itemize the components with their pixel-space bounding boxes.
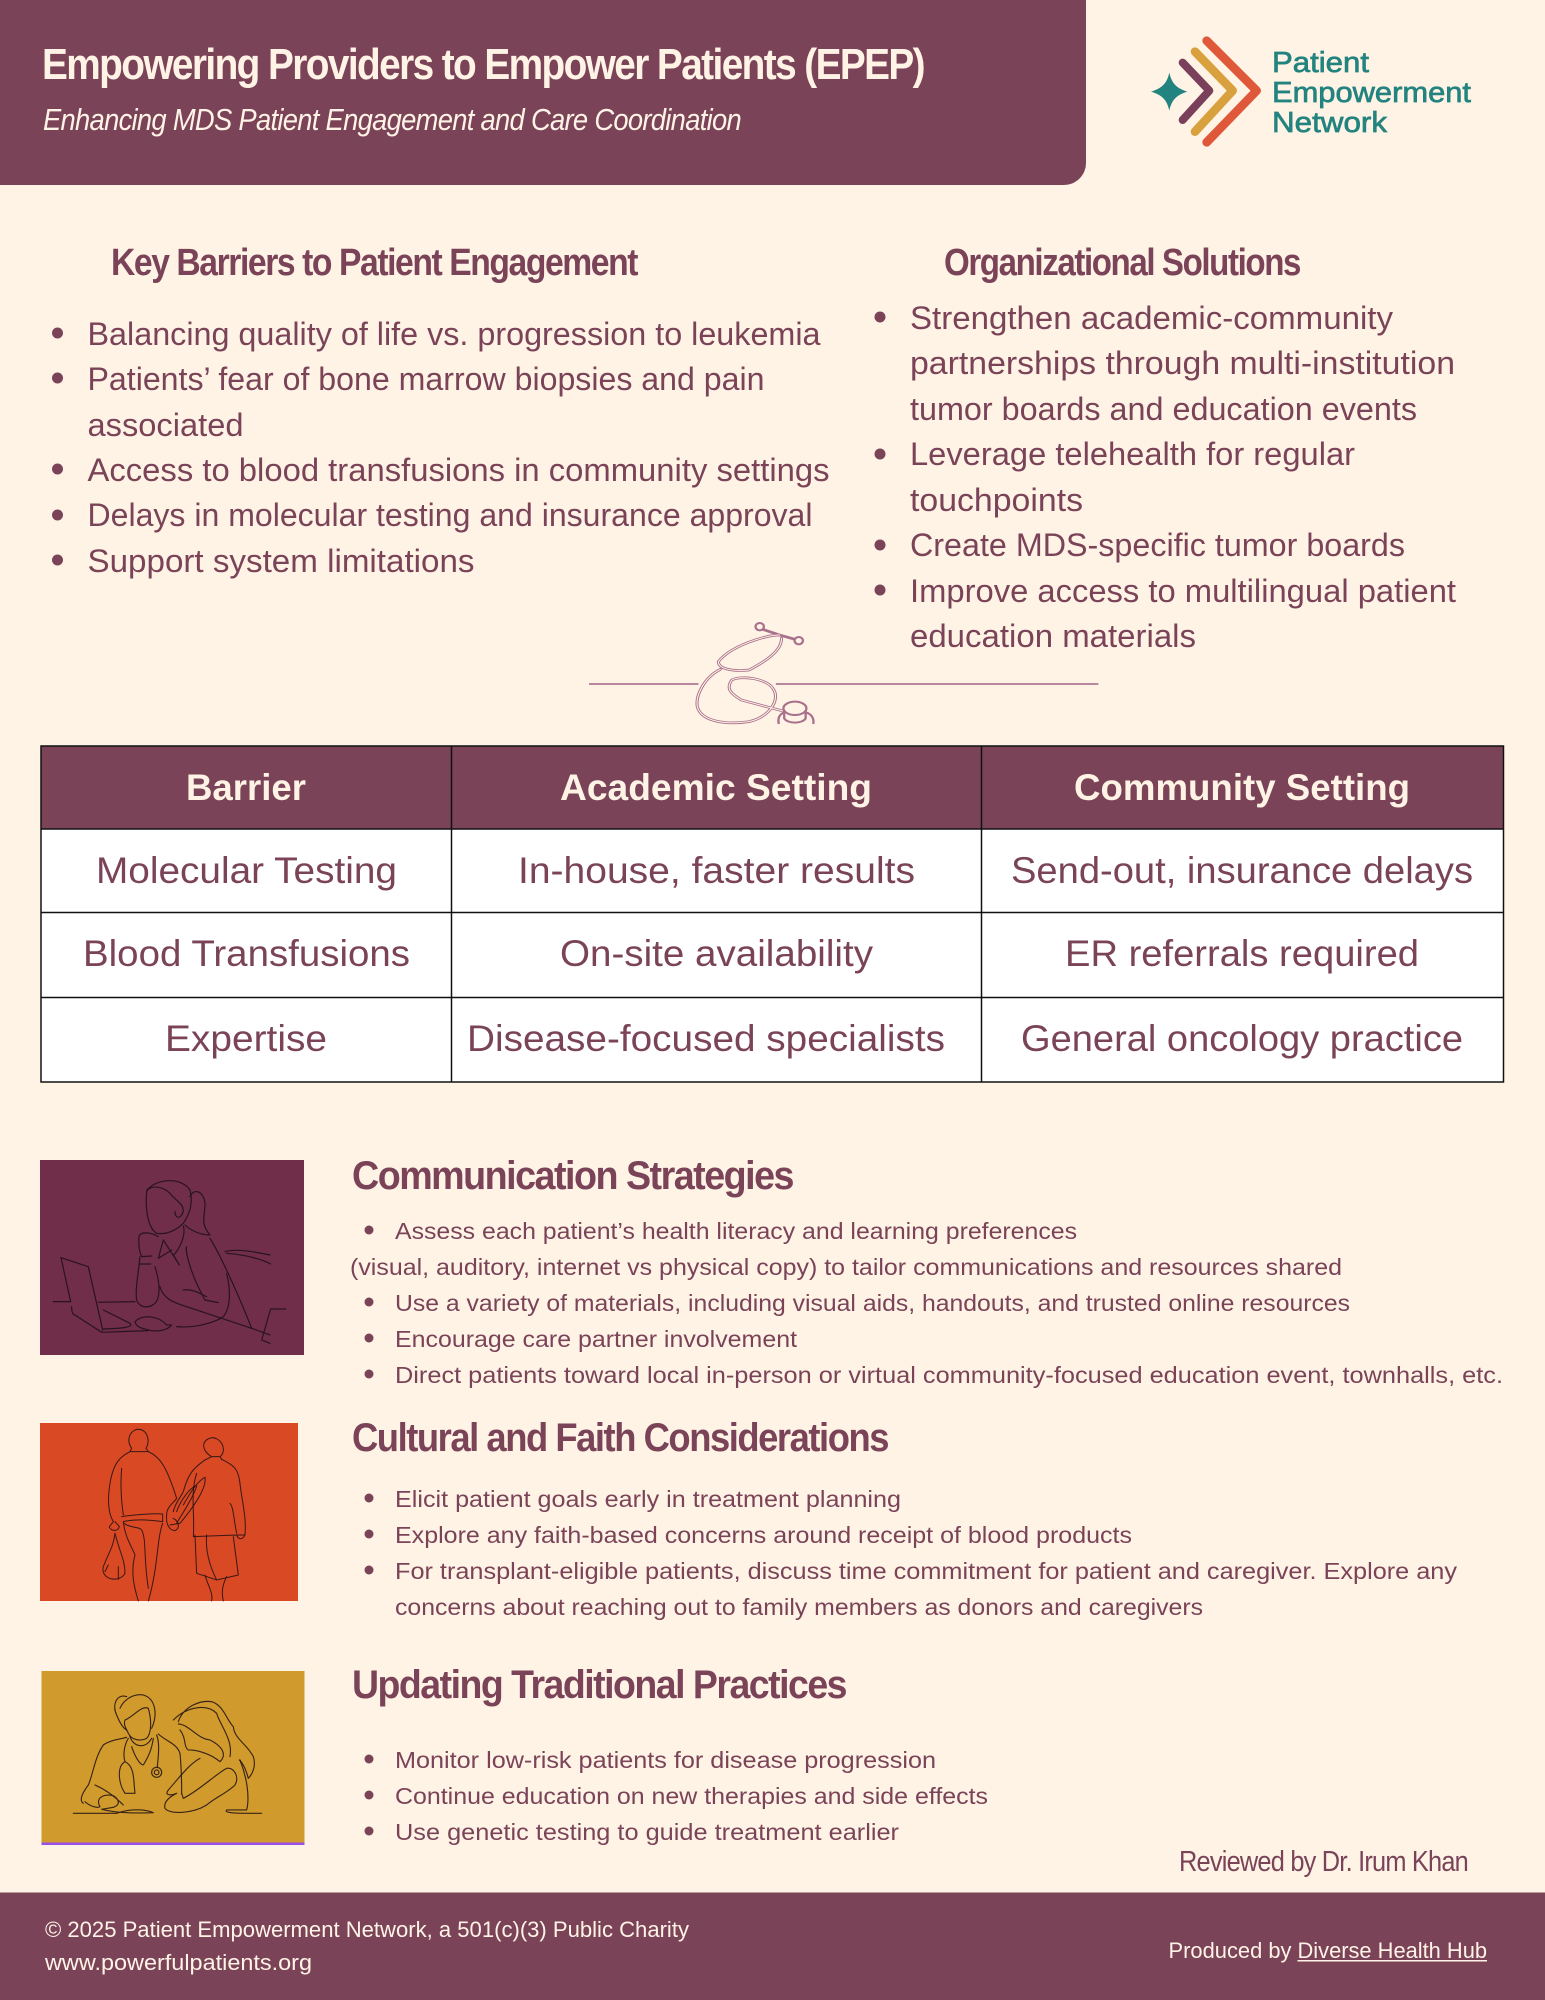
- illustration: woman at laptop: [40, 1160, 304, 1355]
- heading: organizational solutions: Organizational Solutions: [944, 242, 1300, 284]
- list: key barriers: Delays in molecular testing and insurance approval: [88, 497, 812, 533]
- footer copyright: © 2025 Patient Empowerment Network, a 501(c)(3) Public Charity: [45, 1917, 689, 1942]
- list: key barriers: Access to blood transfusions in community settings: [88, 452, 830, 488]
- comparison table: [41, 746, 1504, 1082]
- table body: [41, 829, 1504, 1082]
- panel: key barriers: [52, 242, 830, 579]
- table rows text: In-house, faster results: [518, 850, 915, 891]
- table rows text: Send-out, insurance delays: [1011, 850, 1473, 891]
- list: organizational solutions: Create MDS-specific tumor boards: [910, 527, 1405, 563]
- panel: communication strategies: [350, 1154, 1503, 1388]
- list: communication strategies: Encourage care partner involvement: [395, 1326, 797, 1352]
- icon: stethoscope divider: [589, 623, 1098, 724]
- table rows text: General oncology practice: [1021, 1018, 1463, 1059]
- list: key barriers: associated: [88, 407, 244, 443]
- footer producer credit: [1168, 1938, 1487, 1963]
- illustration: couple walking: [40, 1423, 298, 1601]
- table rows text: ER referrals required: [1065, 933, 1419, 974]
- table rows text: On-site availability: [560, 933, 874, 974]
- footer producer credit: Diverse Health Hub: [1298, 1938, 1487, 1963]
- table header row: Community Setting: [1074, 767, 1410, 808]
- list: updating traditional practices: Monitor low-risk patients for disease progression: [395, 1747, 936, 1773]
- logo wordmark: Patient: [1272, 47, 1369, 79]
- list: organizational solutions: tumor boards and education events: [910, 391, 1417, 427]
- list: updating traditional practices: [364, 1747, 988, 1845]
- list: cultural and faith considerations: For transplant-eligible patients, discuss time commitment for patient and caregiver. Explore any: [395, 1558, 1457, 1584]
- list: key barriers: Support system limitations: [88, 543, 474, 579]
- list: organizational solutions: Strengthen academic-community: [910, 300, 1393, 336]
- footer: [0, 1892, 1545, 2000]
- table header row: Barrier: [186, 767, 306, 808]
- list: cultural and faith considerations: concerns about reaching out to family members as donors and caregivers: [395, 1594, 1203, 1620]
- table rows text: Disease-focused specialists: [467, 1018, 945, 1059]
- heading: cultural and faith considerations: Cultural and Faith Considerations: [352, 1416, 888, 1460]
- logo: Patient Empowerment Network: [1151, 41, 1471, 142]
- panel: updating traditional practices: [352, 1663, 988, 1845]
- icon: chevrons and star: [1151, 41, 1257, 142]
- logo wordmark: Empowerment: [1272, 77, 1471, 109]
- subtitle: Enhancing MDS Patient Engagement and Care Coordination: [43, 102, 741, 137]
- list: key barriers: Balancing quality of life vs. progression to leukemia: [88, 316, 821, 352]
- table header row: [41, 746, 1504, 829]
- list: organizational solutions: [874, 300, 1456, 654]
- reviewer credit: Reviewed by Dr. Irum Khan: [1179, 1846, 1468, 1878]
- table header row: Academic Setting: [560, 767, 872, 808]
- list: organizational solutions: Improve access to multilingual patient: [910, 573, 1456, 609]
- list: key barriers: Patients’ fear of bone marrow biopsies and pain: [88, 361, 764, 397]
- logo wordmark: Network: [1272, 107, 1388, 139]
- list: cultural and faith considerations: [364, 1486, 1457, 1620]
- table rows text: Expertise: [165, 1018, 327, 1059]
- list: communication strategies: Assess each patient’s health literacy and learning preferences: [395, 1218, 1077, 1244]
- list: organizational solutions: Leverage telehealth for regular: [910, 436, 1355, 472]
- heading: communication strategies: Communication Strategies: [352, 1154, 793, 1198]
- list: organizational solutions: partnerships through multi-institution: [910, 345, 1455, 381]
- list: organizational solutions: touchpoints: [910, 482, 1083, 518]
- list: communication strategies: (visual, auditory, internet vs physical copy) to tailor communications and resources shared: [350, 1254, 1342, 1280]
- list: updating traditional practices: Use genetic testing to guide treatment earlier: [395, 1819, 899, 1845]
- footer producer credit: Produced by: [1168, 1938, 1292, 1963]
- panel: cultural and faith considerations: [352, 1416, 1457, 1620]
- list: cultural and faith considerations: Elicit patient goals early in treatment planning: [395, 1486, 901, 1512]
- list: communication strategies: Use a variety of materials, including visual aids, handouts, and trusted online resources: [395, 1290, 1350, 1316]
- list: organizational solutions: education materials: [910, 618, 1196, 654]
- list: communication strategies: Direct patients toward local in-person or virtual community-focused education event, townhalls, etc.: [395, 1362, 1503, 1388]
- panel: organizational solutions: [874, 242, 1456, 654]
- title: Empowering Providers to Empower Patients (EPEP): [42, 40, 924, 89]
- logo wordmark: [1272, 47, 1471, 139]
- list: updating traditional practices: Continue education on new therapies and side effects: [395, 1783, 988, 1809]
- table rows text: Blood Transfusions: [83, 933, 410, 974]
- heading: updating traditional practices: Updating Traditional Practices: [352, 1663, 846, 1707]
- footer website: www.powerfulpatients.org: [44, 1950, 312, 1975]
- header banner: [0, 0, 1086, 185]
- illustration: doctor and patient: [42, 1671, 304, 1845]
- list: key barriers: [52, 316, 830, 579]
- list: cultural and faith considerations: Explore any faith-based concerns around receipt of blood products: [395, 1522, 1132, 1548]
- list: communication strategies: [350, 1218, 1503, 1388]
- table rows text: Molecular Testing: [96, 850, 397, 891]
- table rows text: [83, 850, 1473, 1059]
- heading: key barriers: Key Barriers to Patient Engagement: [111, 242, 639, 284]
